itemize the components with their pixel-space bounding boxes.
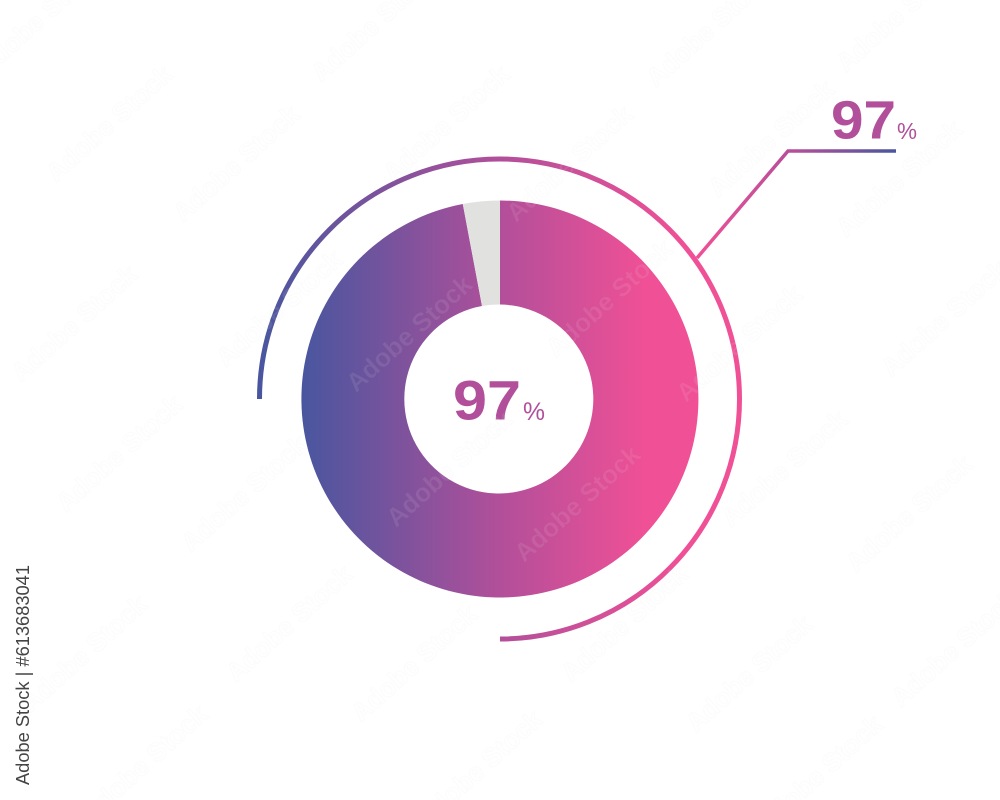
watermark pattern: Adobe Stock xyxy=(715,404,853,533)
donut segment: remaining 3 percent xyxy=(463,200,500,306)
watermark pattern: Adobe Stock xyxy=(702,74,840,203)
watermark pattern: Adobe Stock xyxy=(167,99,305,228)
watermark pattern: Adobe Stock xyxy=(345,599,483,728)
donut chart xyxy=(301,200,698,597)
watermark pattern: Adobe Stock xyxy=(680,609,818,738)
watermark pattern: Adobe Stock xyxy=(500,99,638,228)
leader line xyxy=(697,151,896,258)
watermark pattern: Adobe Stock xyxy=(210,244,348,373)
watermark pattern: Adobe Stock xyxy=(555,559,693,688)
center value: 97 percent: % xyxy=(523,398,545,426)
watermark pattern: Adobe Stock xyxy=(340,269,478,398)
callout value: 97 percent: % xyxy=(897,118,917,144)
watermark pattern: Adobe Stock xyxy=(377,59,515,188)
callout value: 97 percent xyxy=(831,90,917,150)
watermark pattern: Adobe Stock xyxy=(380,404,518,533)
watermark pattern: Adobe Stock xyxy=(5,259,143,388)
watermark pattern: Adobe Stock xyxy=(830,114,968,243)
watermark pattern: Adobe Stock xyxy=(50,389,188,518)
watermark pattern: Adobe Stock xyxy=(840,449,978,578)
watermark pattern: Adobe Stock xyxy=(15,589,153,718)
center value: 97 percent xyxy=(453,368,545,432)
watermark pattern: Adobe Stock xyxy=(220,559,358,688)
side credit text: Adobe Stock | #613683041 xyxy=(13,565,33,785)
watermark pattern: Adobe Stock xyxy=(540,234,678,363)
watermark pattern: Adobe Stock xyxy=(508,439,646,568)
center value: 97 percent: 97 xyxy=(453,368,521,432)
outer progress arc xyxy=(260,159,740,639)
donut segment: 97 percent xyxy=(301,200,698,598)
watermark pattern: Adobe Stock xyxy=(40,59,178,188)
watermark pattern: Adobe Stock xyxy=(175,429,313,558)
watermark pattern: Adobe Stock xyxy=(670,279,808,408)
callout value: 97 percent: 97 xyxy=(831,90,896,150)
